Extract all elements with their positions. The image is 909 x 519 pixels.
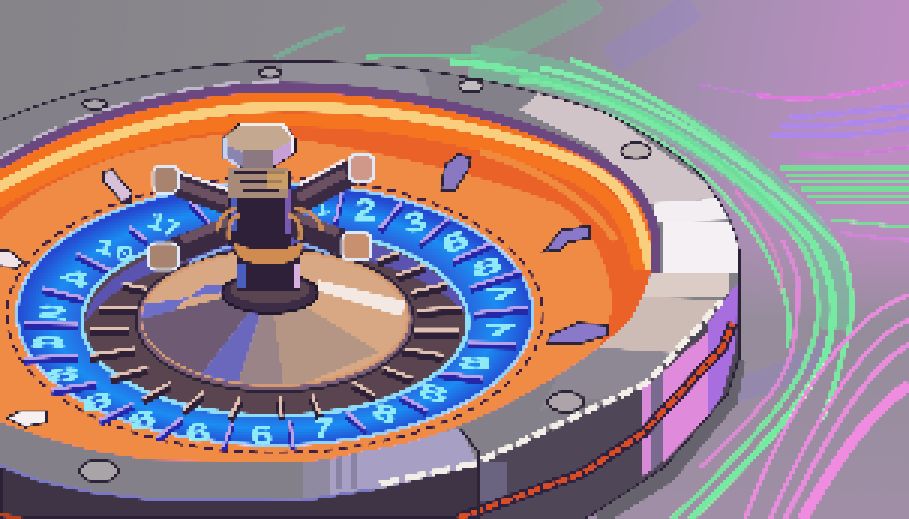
pocket numbers: 8 bbox=[43, 363, 83, 390]
rim top surface bbox=[0, 62, 740, 519]
pocket numbers: 8 bbox=[414, 378, 451, 410]
pocket numbers: 10 bbox=[91, 232, 138, 271]
wheel outer wall bbox=[0, 62, 738, 519]
pocket numbers: 7 bbox=[481, 321, 519, 342]
pocket numbers: 1 bbox=[313, 197, 332, 223]
center hub bbox=[149, 123, 374, 313]
pocket numbers: 2 bbox=[353, 193, 377, 231]
pocket spokes bbox=[90, 252, 462, 421]
pocket separators bbox=[23, 193, 528, 451]
inner pocket track bbox=[82, 228, 468, 421]
hub gold collar bbox=[233, 238, 304, 266]
blue number ring bbox=[17, 183, 533, 454]
pocket numbers: 8 bbox=[367, 397, 402, 432]
pocket numbers bbox=[28, 193, 521, 454]
pocket numbers: 7 bbox=[312, 413, 334, 447]
pocket numbers: 3 bbox=[401, 206, 430, 243]
rim inner plum band bbox=[0, 81, 656, 272]
hub knobs bbox=[149, 155, 374, 270]
pocket numbers: 4 bbox=[56, 263, 93, 295]
pocket numbers: 6 bbox=[250, 421, 274, 454]
hub column bbox=[229, 170, 292, 245]
hub bolt head bbox=[223, 123, 295, 168]
pocket numbers: 8 bbox=[456, 352, 494, 376]
pocket numbers: 8 bbox=[28, 334, 68, 355]
center cone bbox=[120, 248, 414, 392]
hub upper stripes bbox=[229, 168, 289, 198]
energy swirl lines bbox=[275, 0, 909, 519]
pocket numbers: 2 bbox=[34, 300, 71, 327]
hub arms bbox=[168, 160, 356, 262]
wall panel: lilac lit section bbox=[642, 283, 737, 476]
pocket numbers: 8 bbox=[77, 386, 118, 420]
pocket numbers: 17 bbox=[143, 207, 183, 246]
pocket numbers: 7 bbox=[483, 286, 521, 307]
rim bolts bbox=[80, 68, 651, 482]
hub base bbox=[222, 273, 318, 313]
wall groove: orange line bbox=[0, 323, 733, 519]
pocket numbers: 6 bbox=[184, 419, 212, 452]
rim seam lines and white dashes bbox=[380, 301, 722, 519]
pocket numbers: 6 bbox=[437, 224, 475, 262]
orange bowl bbox=[0, 92, 653, 480]
pocket numbers: 8 bbox=[124, 403, 161, 439]
number ring dashed outline bbox=[7, 177, 543, 453]
pocket numbers: 8 bbox=[468, 252, 507, 285]
diamond markers bbox=[0, 154, 607, 427]
